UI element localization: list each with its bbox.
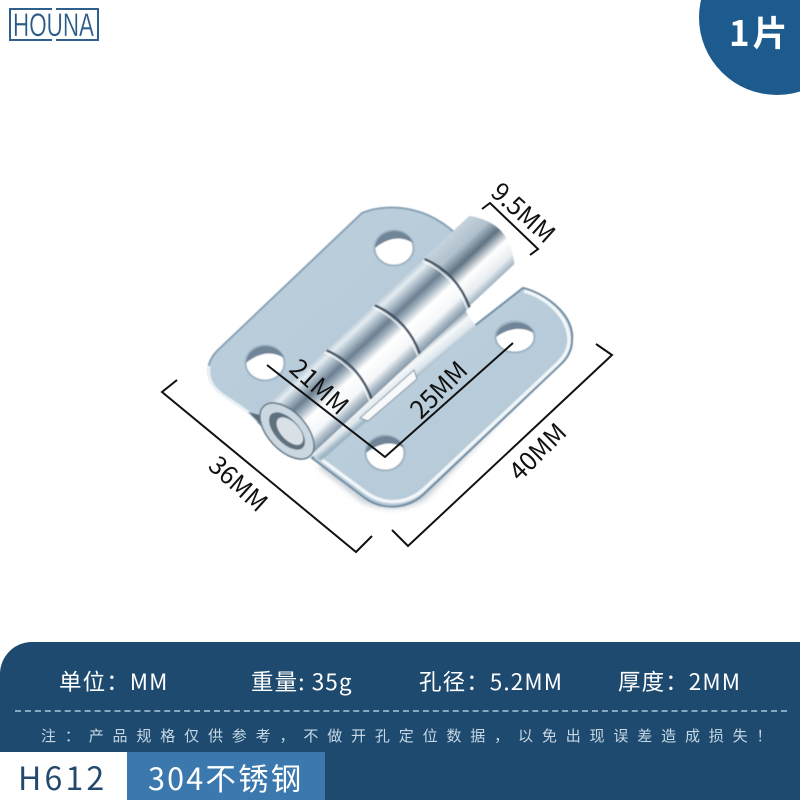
right leaf edge bevel [322,291,569,502]
dimension labels: 21MM [283,350,357,422]
hinge [208,206,572,509]
model number box: H612 [18,754,107,800]
spec: thickness: 厚度：2MM [618,665,741,697]
badge: 1 piece [699,0,800,95]
spec: unit: 单位：MM [59,665,169,697]
dimension labels: 9.5MM [484,173,564,251]
dimension lines [162,203,612,552]
dimension labels: 36MM [202,447,276,519]
end cap [250,393,324,469]
disclaimer note: 注：产品规格仅供参考，不做开孔定位数据，以免出现误差造成损失！ [41,725,780,746]
right leaf [312,288,572,507]
hinge wrap strip [302,306,476,460]
holes [246,230,534,470]
barrel [250,206,524,469]
spec: weight: 重量: 35g [251,665,353,697]
left leaf lower bevel [209,366,258,421]
model number box [0,752,127,800]
material box: 304不锈钢 [148,755,303,799]
left leaf [208,207,462,426]
bottom spec panel [0,642,800,800]
dimension labels: 40MM [500,414,574,488]
left leaf lip shadow [248,412,264,426]
spec: hole diameter: 孔径：5.2MM [419,665,563,697]
shadow [318,340,572,509]
dimension labels: 25MM [401,352,475,426]
dashed divider [15,710,787,712]
product illustration: hinge with dimensions [160,173,614,554]
badge label: 1片 [729,6,791,57]
slot [360,370,417,421]
dimension labels [202,173,574,519]
